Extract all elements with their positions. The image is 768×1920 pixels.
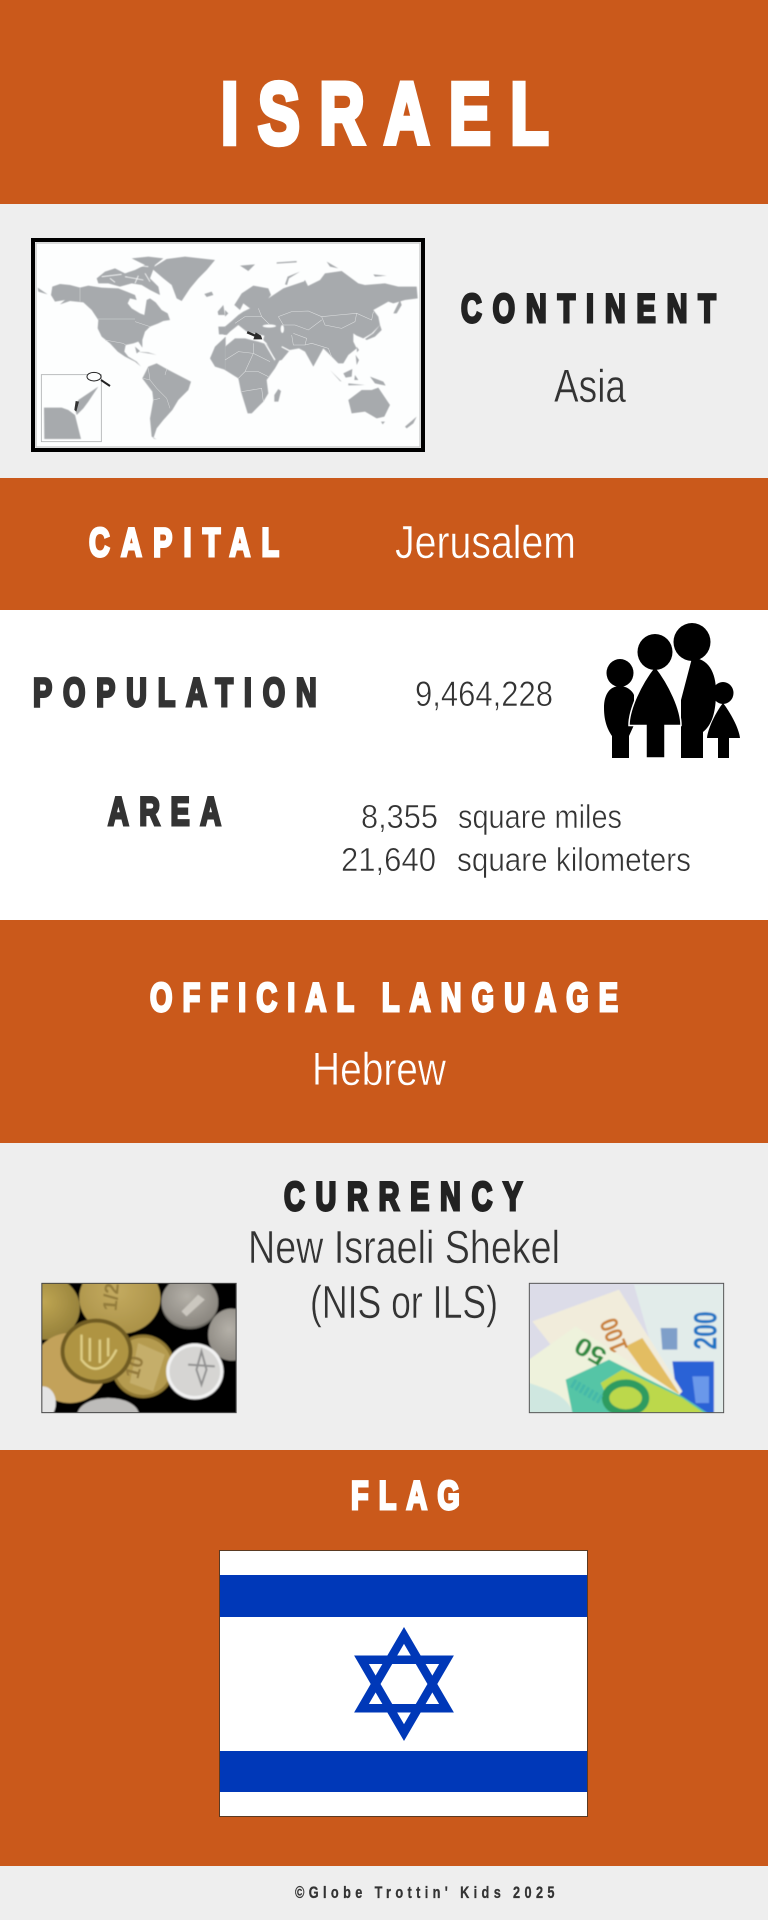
panel: continent <box>0 204 768 478</box>
photo: banknotes: 50 <box>570 1331 611 1371</box>
footer credit: ©Globe Trottin' Kids 2025 <box>295 1883 555 1903</box>
map: Eurasia, Africa and Oceania <box>223 261 418 428</box>
currency value: (NIS or ILS) <box>310 1276 498 1328</box>
currency heading: CURRENCY <box>284 1174 522 1219</box>
photo: coins: 1/2 <box>100 1282 124 1312</box>
population heading: POPULATION <box>33 670 317 715</box>
photo: banknotes <box>529 1283 724 1413</box>
map: Americas and inset <box>38 257 226 442</box>
area heading: AREA <box>108 789 221 834</box>
population value: 9,464,228 <box>415 675 553 714</box>
world map <box>33 240 423 450</box>
photo: coins <box>41 1282 237 1414</box>
panel: currency <box>41 1180 724 1414</box>
continent value: Asia <box>554 360 626 412</box>
currency value: New Israeli Shekel <box>248 1221 560 1273</box>
area values <box>341 798 691 878</box>
panel: footer <box>0 1866 768 1920</box>
continent heading: CONTINENT <box>461 286 716 331</box>
area values: 21,640 <box>341 841 436 878</box>
icon: star of David <box>362 1635 446 1733</box>
capital value: Jerusalem <box>395 516 576 568</box>
title: ISRAEL <box>221 65 549 163</box>
flag heading: FLAG <box>351 1473 460 1518</box>
title band <box>0 0 768 204</box>
photo: coins: 10 <box>122 1354 149 1381</box>
language value: Hebrew <box>312 1043 447 1095</box>
language heading: OFFICIAL LANGUAGE <box>150 975 618 1020</box>
photo: banknotes: 200 <box>688 1311 724 1350</box>
area values: square miles <box>458 798 622 835</box>
area values: 8,355 <box>361 798 438 835</box>
area values: square kilometers <box>457 841 691 878</box>
panel: flag <box>0 1450 768 1866</box>
capital heading: CAPITAL <box>89 520 279 565</box>
photo: banknotes: 100 <box>595 1314 634 1357</box>
flag of Israel <box>220 1550 588 1816</box>
panel: official language <box>0 920 768 1143</box>
icon: family <box>604 623 740 758</box>
panel: capital <box>0 478 768 610</box>
panel: population and area <box>0 610 768 920</box>
currency value <box>248 1221 560 1328</box>
